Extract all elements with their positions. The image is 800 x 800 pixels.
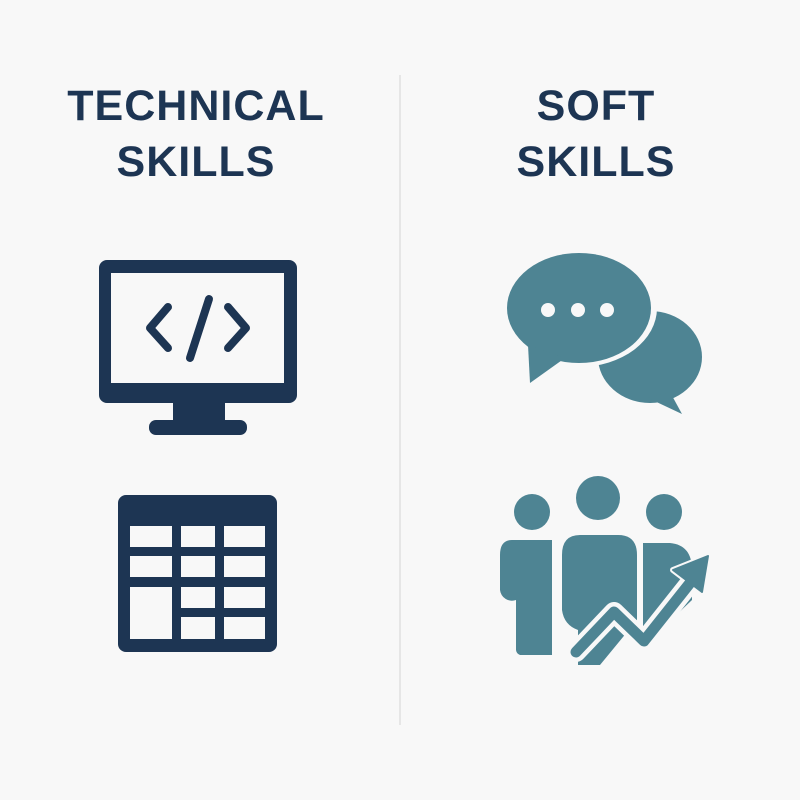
heading: soft skills: SOFT	[537, 82, 655, 130]
icon: speech bubbles	[501, 249, 702, 414]
icon: table grid	[118, 495, 277, 652]
icon: team with growth arrow	[500, 476, 708, 665]
heading: soft skills: SKILLS	[517, 138, 675, 186]
divider	[399, 75, 401, 725]
heading: technical skills	[67, 82, 325, 186]
heading: technical skills: TECHNICAL	[67, 82, 325, 130]
icon: monitor with code	[99, 260, 297, 435]
heading: technical skills: SKILLS	[117, 138, 275, 186]
heading: soft skills	[517, 82, 675, 186]
